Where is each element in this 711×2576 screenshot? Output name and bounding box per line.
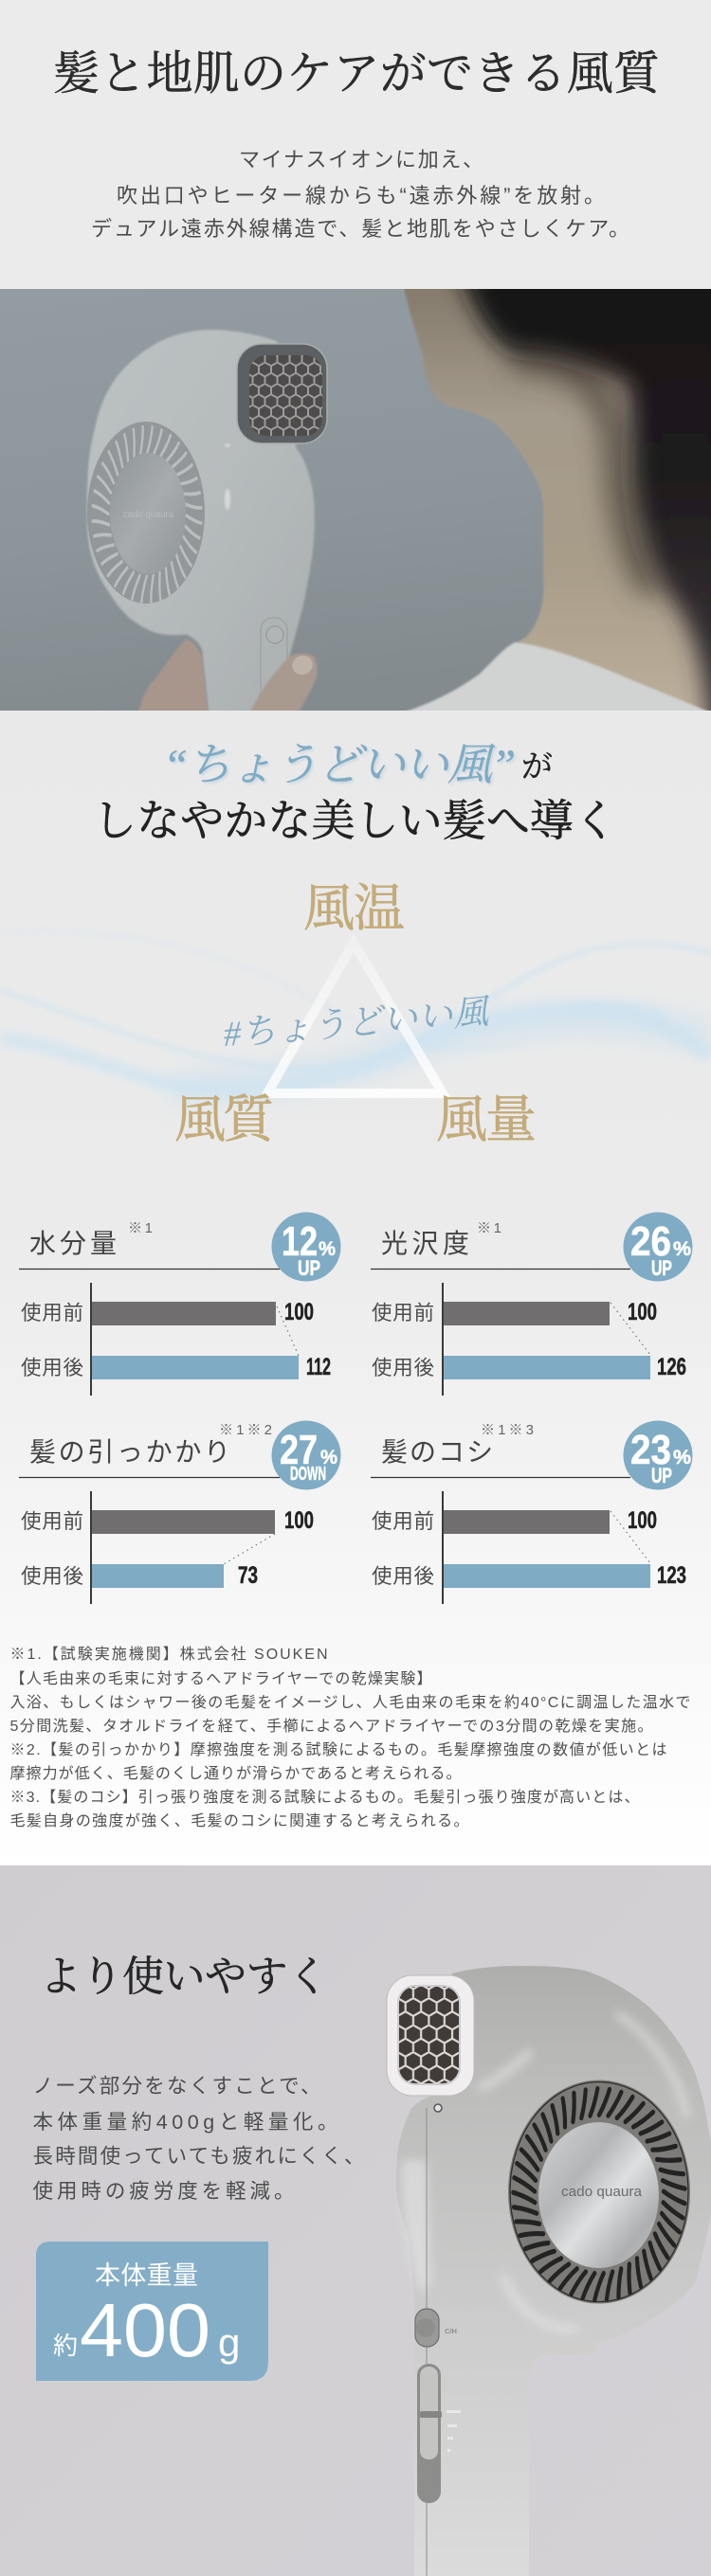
chart: 髪のコシ xyxy=(371,1421,692,1604)
dryer intake ring: cado quaura xyxy=(123,510,173,520)
footnotes: ※1.【試験実施機関】株式会社 SOUKEN xyxy=(9,1646,328,1663)
body text xyxy=(32,2075,364,2203)
footnotes: 毛髪自身の強度が強く、毛髪のコシに関連すると考えられる。 xyxy=(9,1812,468,1829)
title: 髪と地肌のケアができる風質 xyxy=(53,47,662,99)
badge: 23% UP: % xyxy=(673,1447,691,1468)
bar labels: 使用後 xyxy=(372,1357,434,1379)
bar labels xyxy=(372,1510,434,1588)
bar labels: 使用前 xyxy=(21,1510,83,1533)
chart: 光沢度 xyxy=(371,1213,692,1396)
hair dryer body xyxy=(86,330,315,715)
hashtag: ちょうどいい風: #ちょうどいい風 xyxy=(222,993,492,1054)
note mark: ※1※3 xyxy=(481,1422,534,1438)
chart title: 水分量 xyxy=(29,1229,117,1258)
badge: 23% UP: 23 xyxy=(630,1427,671,1473)
heading: ちょうどいい風: が xyxy=(521,750,553,784)
footnotes: ※3.【髪のコシ】引っ張り強度を測る試験によるもの。毛髪引っ張り強度が高いとは、 xyxy=(9,1789,639,1806)
badge: 26% UP xyxy=(624,1213,692,1281)
bar values xyxy=(628,1299,686,1380)
chart title: 光沢度 xyxy=(381,1229,469,1258)
note mark: ※1※2 xyxy=(219,1422,272,1438)
callout: 本体重量 約400g: 400 xyxy=(80,2288,210,2372)
hair dryer product xyxy=(387,1966,711,2576)
hand: fingers xyxy=(137,639,209,715)
body text: 長時間使っていても疲れにくく、 xyxy=(32,2145,364,2168)
label: 風温: 風温 xyxy=(303,880,405,937)
label: 風質: 風質 xyxy=(174,1091,276,1148)
dryer nozzle with honeycomb xyxy=(237,344,327,443)
badge: 27% DOWN: 27 xyxy=(280,1427,318,1473)
neck shadow xyxy=(512,358,654,592)
bar values: 100 xyxy=(284,1507,314,1534)
chart title: 髪の引っかかり xyxy=(29,1437,230,1467)
badge: 12% UP: 12 xyxy=(282,1218,318,1265)
bar labels xyxy=(21,1510,83,1588)
footnotes: 5分間洗髪、タオルドライを経て、手櫛によるヘアドライヤーでの3分間の乾燥を実施。 xyxy=(9,1718,652,1735)
bar values: 73 xyxy=(238,1562,258,1589)
body highlights xyxy=(479,2013,687,2329)
callout: 本体重量 約400g: 本体重量 xyxy=(95,2261,198,2290)
neck and skin xyxy=(403,284,711,720)
bars xyxy=(91,1491,275,1604)
airflow slider xyxy=(417,2364,461,2503)
body text: ノーズ部分をなくすことで、 xyxy=(32,2075,320,2098)
callout: 本体重量 約400g: g xyxy=(218,2320,240,2365)
footnotes xyxy=(9,1646,690,1829)
callout: 本体重量 約400g: 約 xyxy=(53,2332,78,2360)
heading: しなやかな美しい髪へ導く: しなやかな美しい髪へ導く xyxy=(93,797,617,845)
badge: 12% UP: % xyxy=(319,1238,336,1260)
bar values: 100 xyxy=(628,1507,657,1534)
bar values: 126 xyxy=(657,1354,686,1380)
dryer intake ring xyxy=(87,422,205,603)
intro text block: 吹出口やヒーター線からも“遠赤外線”を放射。 xyxy=(117,184,605,207)
callout: 本体重量 約400g xyxy=(36,2242,268,2381)
footnotes: 摩擦力が低く、毛髪のくし通りが滑らかであると考えられる。 xyxy=(9,1765,461,1782)
badge: 27% DOWN: DOWN xyxy=(290,1464,326,1485)
bar labels xyxy=(21,1302,83,1379)
bar values: 112 xyxy=(306,1354,331,1380)
badge: 12% UP: UP xyxy=(298,1256,320,1280)
badge: 23% UP xyxy=(624,1421,692,1489)
bars xyxy=(443,1491,650,1604)
badge: 26% UP: UP xyxy=(651,1256,672,1280)
intro text block xyxy=(91,148,629,241)
bar values: 123 xyxy=(657,1562,686,1589)
note mark: ※1 xyxy=(477,1220,501,1236)
body text: 本体重量約400gと軽量化。 xyxy=(32,2111,337,2134)
bar values xyxy=(628,1507,686,1589)
hand: thumb xyxy=(248,654,317,715)
nozzle with honeycomb xyxy=(387,1975,474,2096)
hair xyxy=(455,265,711,739)
heading: ちょうどいい風: “ちょうどいい風” xyxy=(163,741,516,790)
badge: 12% UP xyxy=(271,1213,341,1281)
bar values xyxy=(238,1507,314,1589)
photo: woman drying hair with hair dryer xyxy=(0,289,711,711)
chart: 髪の引っかかり xyxy=(19,1421,341,1604)
left body highlight xyxy=(401,2160,431,2293)
badge: 27% DOWN: % xyxy=(320,1447,337,1468)
footnotes: 入浴、もしくはシャワー後の毛髪をイメージし、人毛由来の毛束を約40°Cに調温した温水で xyxy=(9,1694,690,1711)
section: breeze background xyxy=(0,711,711,1865)
logo on disc: cado quaura xyxy=(561,2184,643,2200)
bar labels: 使用後 xyxy=(21,1565,83,1588)
bar labels: 使用後 xyxy=(372,1565,434,1588)
bottom vent xyxy=(540,2340,597,2355)
small sensor xyxy=(434,2104,442,2112)
triangle xyxy=(267,943,443,1093)
bars xyxy=(91,1283,299,1396)
dryer body xyxy=(396,1966,711,2576)
body highlights xyxy=(225,443,230,510)
intake ring with fins xyxy=(508,2081,690,2304)
thumbnail xyxy=(292,656,313,675)
bar values: 100 xyxy=(284,1299,314,1325)
footnotes: 【人毛由来の毛束に対するヘアドライヤーでの乾燥実験】 xyxy=(9,1670,432,1687)
section: lightweight background xyxy=(0,1865,711,2576)
label: 風量: 風量 xyxy=(436,1091,537,1148)
bar values xyxy=(284,1299,331,1380)
badge: 26% UP: % xyxy=(673,1238,691,1260)
footnotes: ※2.【髪の引っかかり】摩擦強度を測る試験によるもの。毛髪摩擦強度の数値が低いとは xyxy=(9,1741,667,1758)
chart title: 髪のコシ xyxy=(381,1437,493,1467)
bars xyxy=(443,1283,650,1396)
body text: 使用時の疲労度を軽減。 xyxy=(32,2180,294,2203)
section: intro background xyxy=(0,0,711,289)
badge: 23% UP: UP xyxy=(651,1464,672,1487)
wave background xyxy=(0,931,711,1091)
shirt xyxy=(393,642,706,715)
bar values: 100 xyxy=(628,1299,657,1325)
badge: 26% UP: 26 xyxy=(630,1218,671,1265)
cold/hot switch: C/H xyxy=(445,2327,457,2335)
cold/hot switch xyxy=(415,2309,457,2347)
bar labels xyxy=(372,1302,434,1379)
bar labels: 使用後 xyxy=(21,1357,83,1379)
bar labels: 使用前 xyxy=(372,1510,434,1533)
badge: 27% DOWN xyxy=(271,1421,341,1489)
chart: 水分量 xyxy=(19,1213,341,1396)
intro text block: デュアル遠赤外線構造で、髪と地肌をやさしくケア。 xyxy=(91,217,629,241)
intro text block: マイナスイオンに加え、 xyxy=(239,148,483,171)
heading: より使いやすく: より使いやすく xyxy=(40,1954,329,2000)
dryer switch xyxy=(260,618,288,694)
bar labels: 使用前 xyxy=(372,1302,434,1324)
note mark: ※1 xyxy=(128,1220,153,1236)
bar labels: 使用前 xyxy=(21,1302,83,1324)
